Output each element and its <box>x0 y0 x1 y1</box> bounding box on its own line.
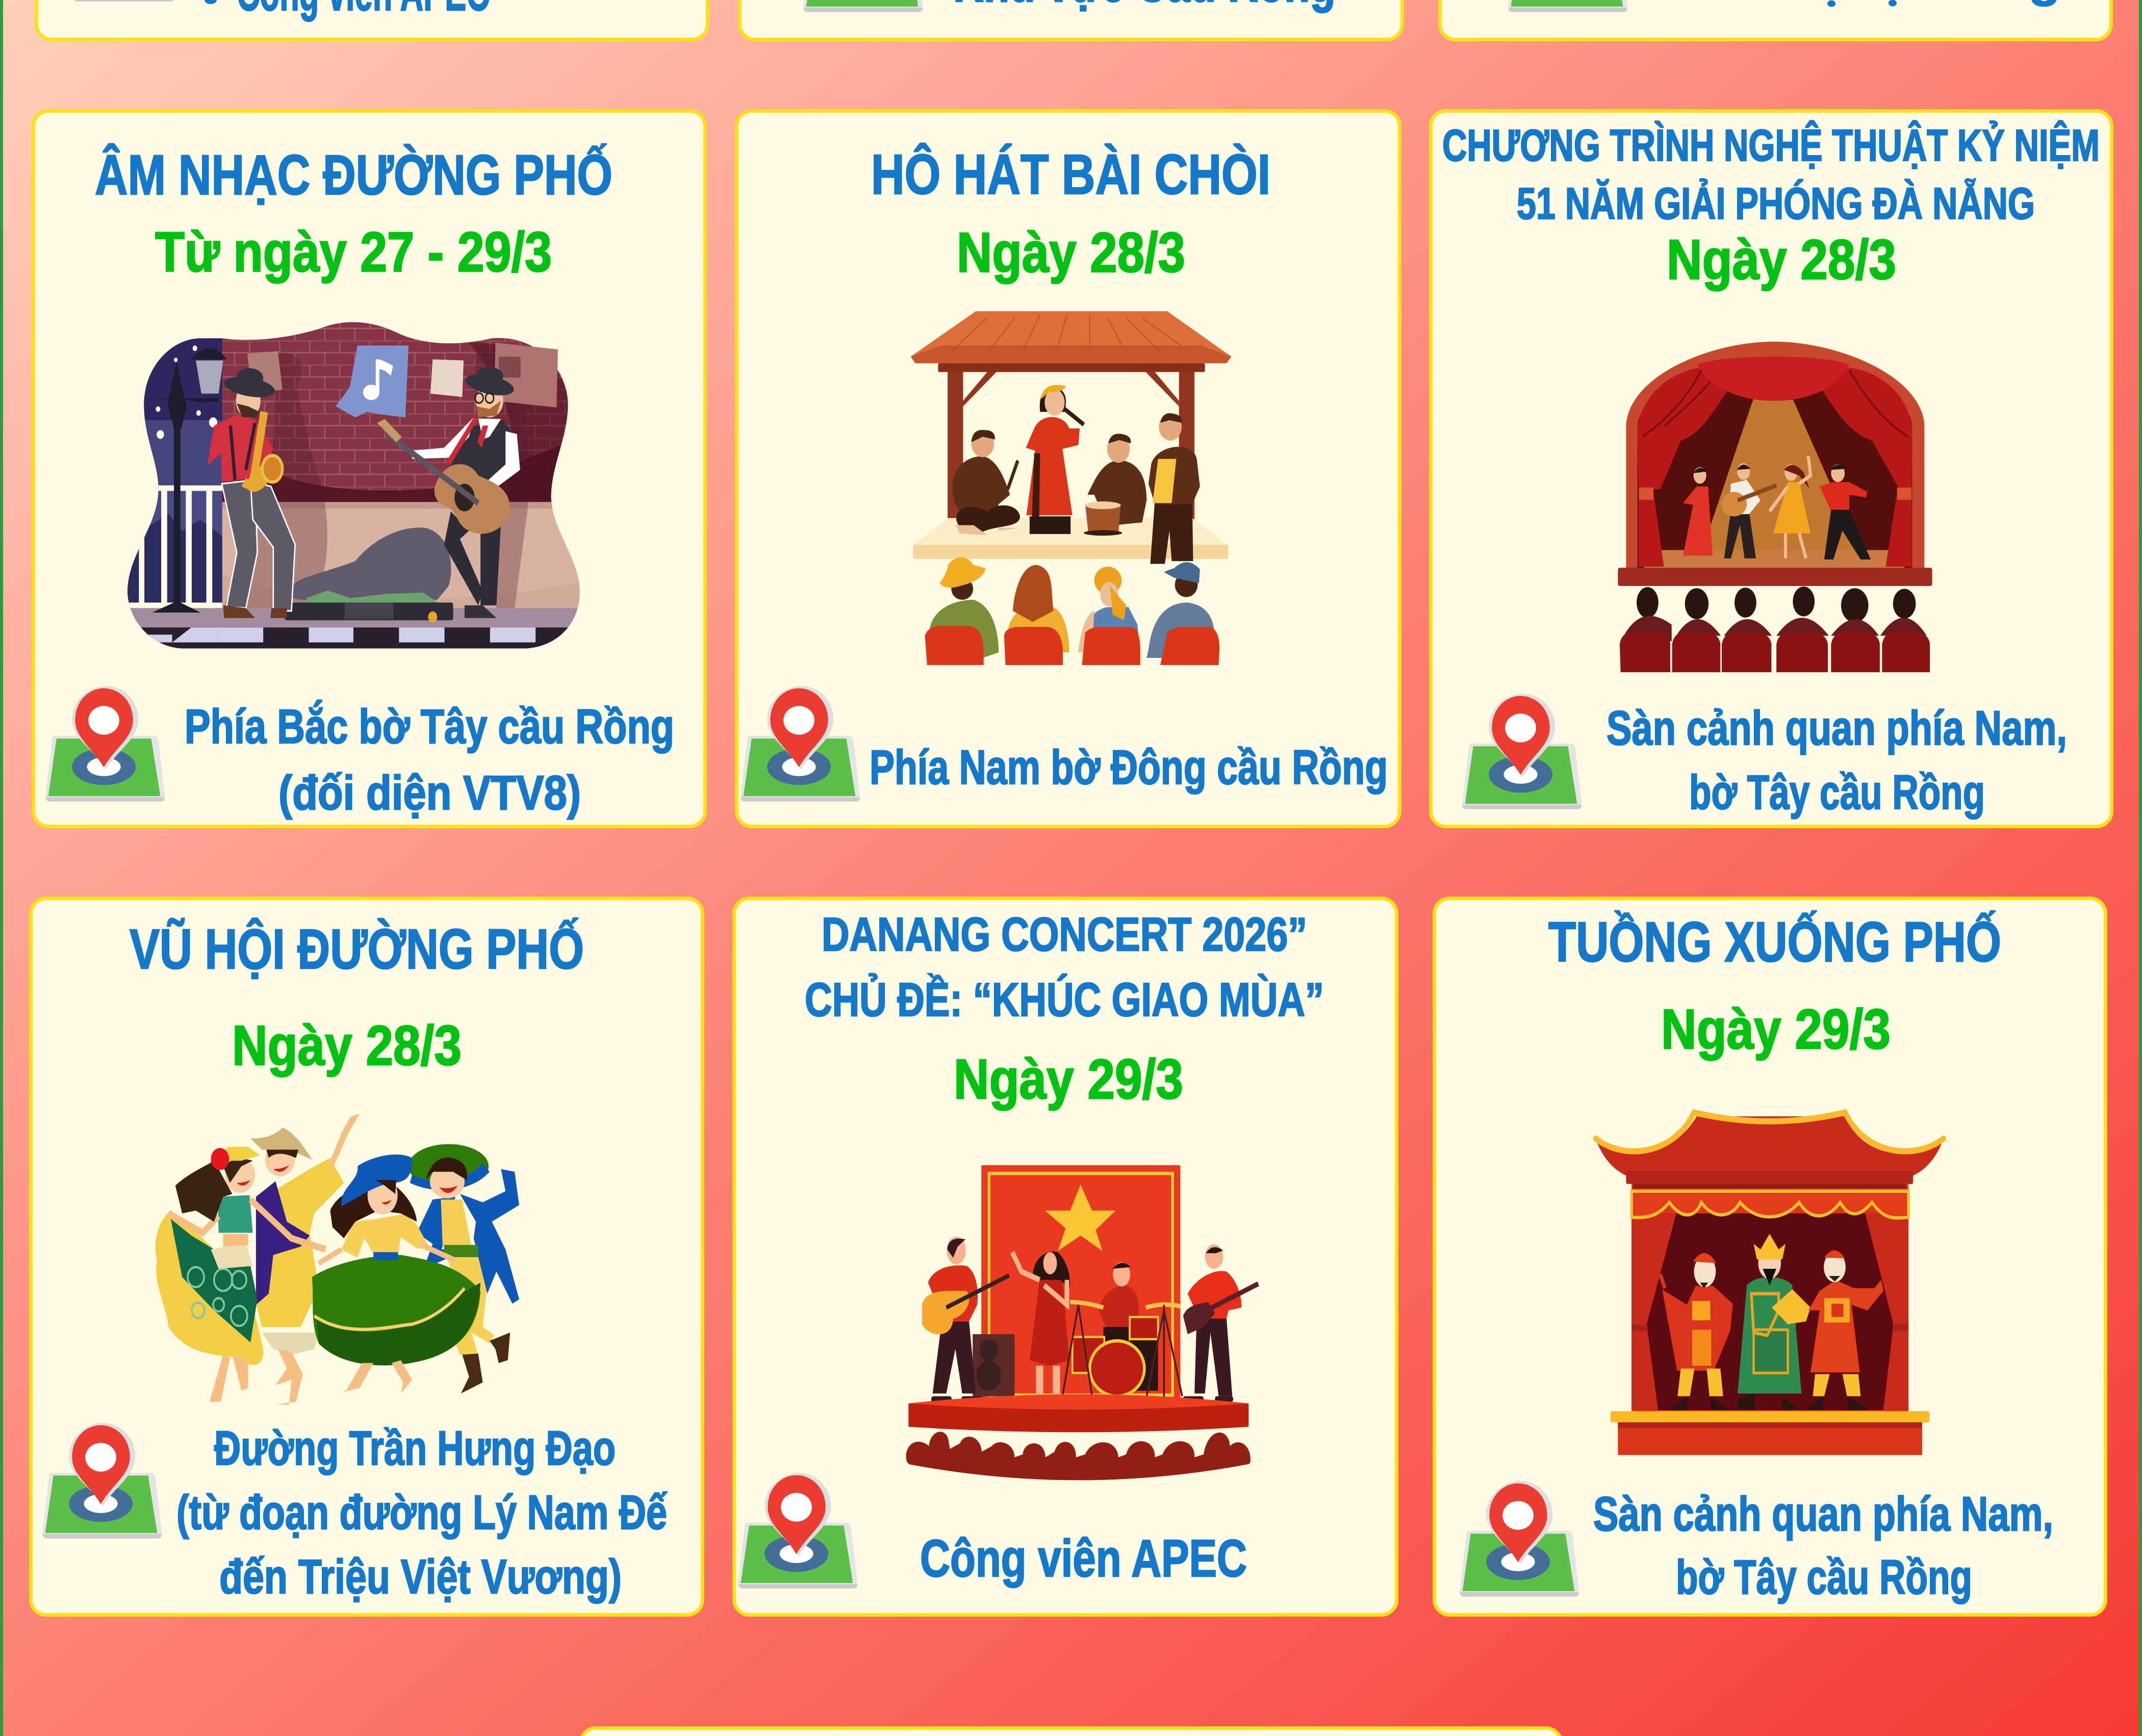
icon: map pin <box>1460 1481 1579 1597</box>
right green edge strip <box>2139 0 2142 1736</box>
panel: Âm nhạc đường phố <box>34 111 705 826</box>
singer <box>1030 1280 1069 1366</box>
location text: Công viên APEC <box>920 1529 1247 1588</box>
illustration: theatre stage <box>1618 342 1932 672</box>
title: DANANG CONCERT 2026” <box>822 908 1307 961</box>
title <box>805 908 1324 1026</box>
date: Ngày 29/3 <box>954 1048 1183 1111</box>
location text <box>176 1421 667 1604</box>
music sheet <box>336 346 409 417</box>
panel: bottom card (cropped) <box>580 1728 1562 1736</box>
location text: (từ đoạn đường Lý Nam Đế <box>176 1486 667 1540</box>
icon: map pin <box>803 0 923 12</box>
guitarist <box>444 512 483 605</box>
icon: map pin <box>738 1473 857 1589</box>
title: ÂM NHẠC ĐƯỜNG PHỐ <box>95 144 613 207</box>
bassist <box>1194 1316 1232 1396</box>
woman in yellow skirt <box>156 1211 263 1365</box>
drummer <box>1087 460 1146 525</box>
icon: map pin <box>42 1423 162 1539</box>
location text: Phía Nam bờ Đông cầu Rồng <box>870 741 1388 795</box>
panel: Vũ hội đường phố <box>31 899 703 1615</box>
audience <box>929 600 999 658</box>
date: Ngày 28/3 <box>232 1014 462 1077</box>
panel: Tuồng xuống phố <box>1434 899 2105 1615</box>
location text: Phía Bắc bờ Tây cầu Rồng <box>185 700 674 754</box>
illustration: dancers <box>156 1114 519 1405</box>
reader <box>1150 500 1193 564</box>
panel: top right card (cropped) <box>1440 0 2111 40</box>
guitar case <box>289 528 451 600</box>
date: Ngày 28/3 <box>957 221 1185 284</box>
woman in green skirt <box>312 1255 480 1365</box>
panel: top middle card (cropped) <box>740 0 1402 40</box>
title: HÔ HÁT BÀI CHÒI <box>871 143 1270 206</box>
icon: map pin <box>1462 694 1582 809</box>
title: CHỦ ĐỀ: “KHÚC GIAO MÙA” <box>805 973 1324 1026</box>
man in blue coat <box>444 1249 494 1355</box>
illustration: street musicians <box>123 315 586 652</box>
illustration: concert stage <box>906 1165 1258 1480</box>
guitarist left <box>933 1321 976 1393</box>
icon: map pin <box>75 0 173 2</box>
date: Từ ngày 27 - 29/3 <box>155 221 552 284</box>
location text <box>185 700 674 820</box>
illustration: tuồng stage <box>1596 1112 1944 1455</box>
location text <box>1593 1487 2053 1604</box>
audience <box>1637 586 1916 623</box>
right actor <box>1808 1280 1883 1372</box>
panel: top left card (cropped) <box>37 0 708 40</box>
icon: location bullet <box>205 0 217 4</box>
singer <box>1026 417 1080 515</box>
title <box>1442 120 2100 228</box>
seated musician <box>953 456 1010 512</box>
left actor <box>1660 1274 1731 1368</box>
man with straw hat <box>255 1158 344 1327</box>
wall shadows <box>223 353 327 608</box>
king <box>1738 1277 1801 1393</box>
location text: bờ Tây cầu Rồng <box>1676 1550 1972 1604</box>
location text: (đối diện VTV8) <box>278 766 581 820</box>
icon: map pin <box>741 686 860 802</box>
location text: đến Triệu Việt Vương) <box>219 1550 622 1604</box>
title: VŨ HỘI ĐƯỜNG PHỐ <box>130 918 584 981</box>
panel: Chương trình nghệ thuật <box>1431 111 2111 826</box>
crowd <box>906 1432 1251 1480</box>
icon: map pin <box>45 686 165 802</box>
location text remnants <box>1827 0 2060 7</box>
panel: Hô hát bài chòi <box>736 111 1399 826</box>
lamp post <box>152 420 200 612</box>
date: Ngày 29/3 <box>1661 998 1891 1061</box>
date: Ngày 28/3 <box>1667 228 1896 291</box>
drummer <box>1099 1285 1139 1327</box>
saxophonist <box>222 480 295 611</box>
icon: map pin <box>1508 0 1627 12</box>
illustration: bài chòi stage <box>911 311 1231 665</box>
stage platform <box>908 1394 1248 1432</box>
location text: Đường Trần Hưng Đạo <box>214 1421 616 1475</box>
location text <box>1606 701 2067 820</box>
left green edge strip <box>0 0 3 1736</box>
location text: bờ Tây cầu Rồng <box>1689 765 1985 820</box>
panel: Danang Concert 2026 <box>734 899 1396 1615</box>
performers <box>1683 456 1871 559</box>
title: TUỒNG XUỐNG PHỐ <box>1548 911 2001 974</box>
